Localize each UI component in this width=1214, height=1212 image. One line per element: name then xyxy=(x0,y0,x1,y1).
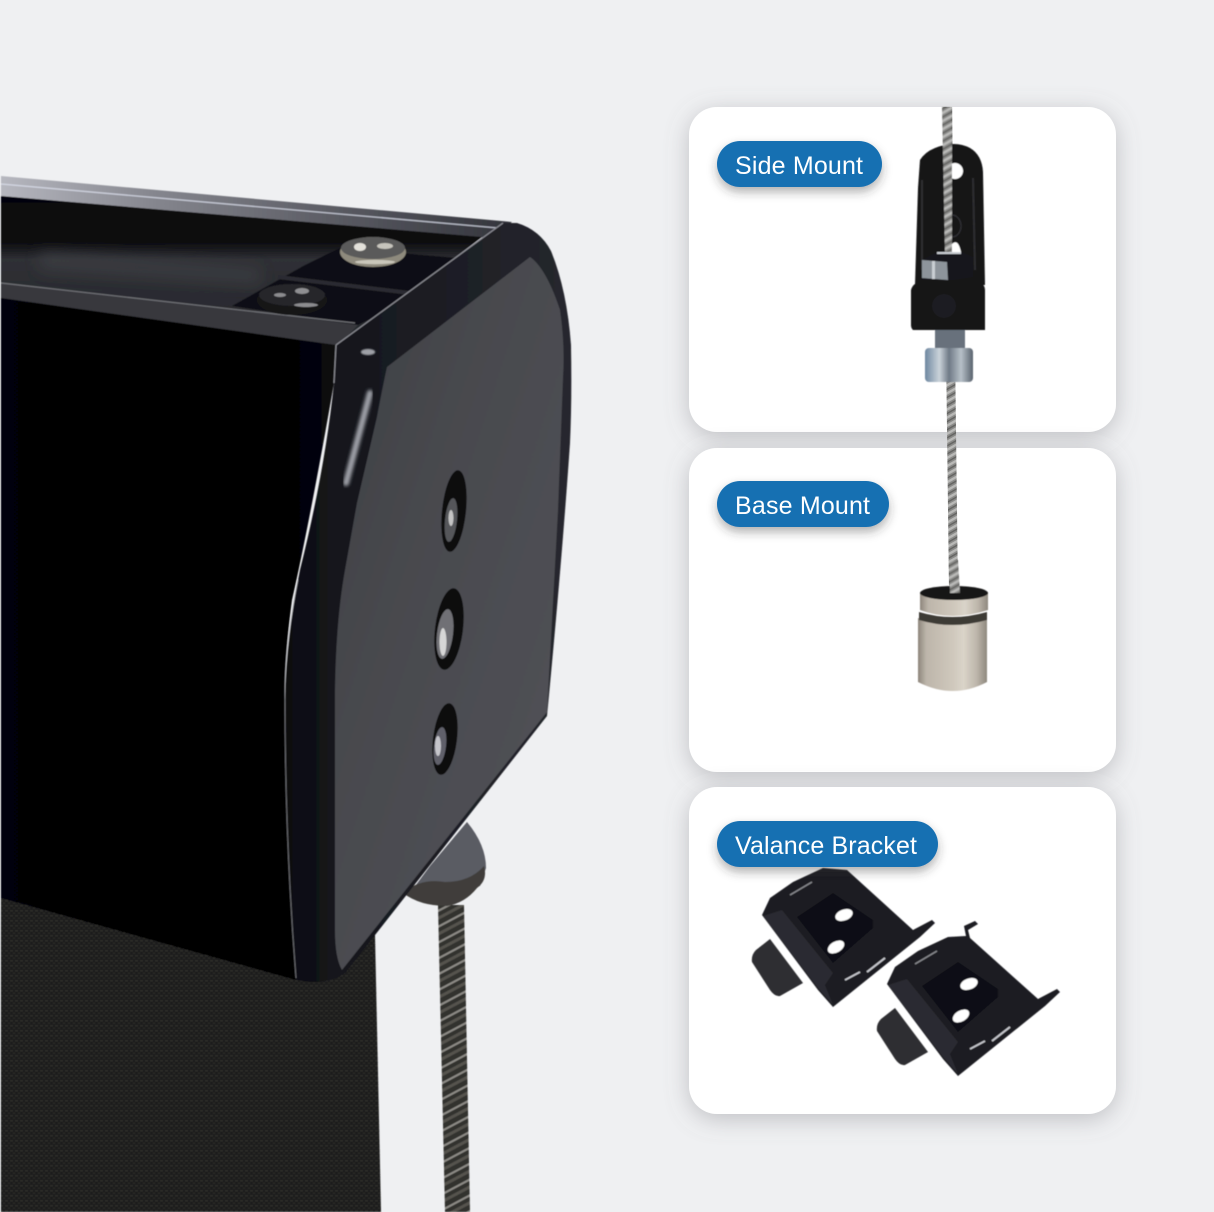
fabric: black blind fabric xyxy=(1,898,381,1212)
hole: middle xyxy=(430,587,468,671)
panel: side mount xyxy=(689,107,1116,432)
icon: second valance bracket xyxy=(877,921,1060,1076)
rail top lip xyxy=(1,176,512,238)
grey front ledge of the recess xyxy=(1,283,358,347)
screw: lower xyxy=(257,284,327,315)
rail top recess xyxy=(1,196,482,347)
icon: side mount fitting xyxy=(911,107,985,382)
adjustment knob xyxy=(403,822,486,906)
label: valance bracket: Valance Bracket xyxy=(735,832,917,860)
gap ring xyxy=(919,612,987,625)
black clevis body xyxy=(915,144,985,285)
cylinder body xyxy=(918,618,987,691)
hole: lower xyxy=(429,702,461,776)
hole: top xyxy=(438,469,470,553)
bracket edge line xyxy=(334,223,503,383)
collar xyxy=(911,280,985,330)
photo: roller blind headrail with side bracket xyxy=(1,176,571,1212)
label: base mount xyxy=(717,481,889,527)
label: side mount xyxy=(717,141,882,187)
hex nut xyxy=(922,252,973,281)
label: base mount: Base Mount xyxy=(735,492,870,520)
cable entry xyxy=(949,560,960,593)
thin cable spanning side mount and base mount xyxy=(943,107,958,590)
panel: base mount xyxy=(689,448,1116,772)
steel cable below the knob xyxy=(438,905,470,1212)
screw: upper xyxy=(340,237,406,267)
front face of the headrail xyxy=(1,298,336,980)
icon: base mount fitting xyxy=(918,560,988,691)
bracket side plate xyxy=(335,257,564,970)
cable over the clevis xyxy=(942,107,952,256)
black top face xyxy=(920,586,988,600)
bracket rim xyxy=(285,223,571,982)
label: side mount: Side Mount xyxy=(735,152,863,180)
rim highlight xyxy=(346,393,370,483)
cylinder cap xyxy=(920,593,988,616)
panel: valance bracket xyxy=(689,787,1116,1114)
icon: first valance bracket xyxy=(752,868,935,1007)
threaded stem xyxy=(935,330,965,350)
mounting plate under the screws xyxy=(232,248,458,325)
label: valance bracket xyxy=(717,821,938,867)
steel ferrule xyxy=(925,348,973,382)
